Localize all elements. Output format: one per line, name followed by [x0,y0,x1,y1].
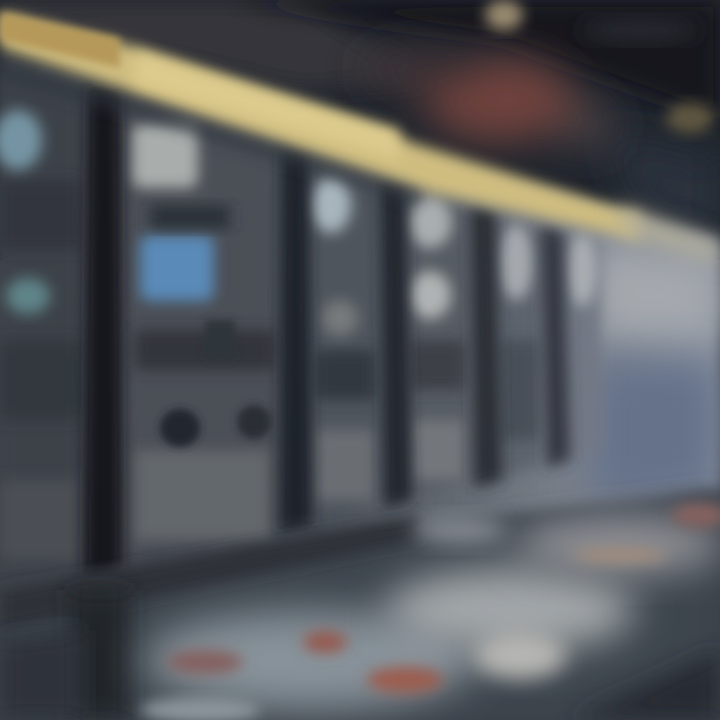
floor: dark base [0,490,720,720]
machine panels [0,70,600,585]
machine dark buttons [160,320,271,447]
ceiling lights [485,0,714,133]
yellow overhead beam [0,12,720,262]
floor: dark lower right corner [570,650,720,720]
floor: pale reflective patches [140,515,720,720]
dark vertical columns [84,85,570,578]
floor: red markings [167,503,720,693]
machine screens and lights [0,110,598,336]
machine bank: base wall [0,50,720,610]
ceiling glow: red-brown patch [360,48,615,149]
machine horizontal shading bands [0,180,538,560]
